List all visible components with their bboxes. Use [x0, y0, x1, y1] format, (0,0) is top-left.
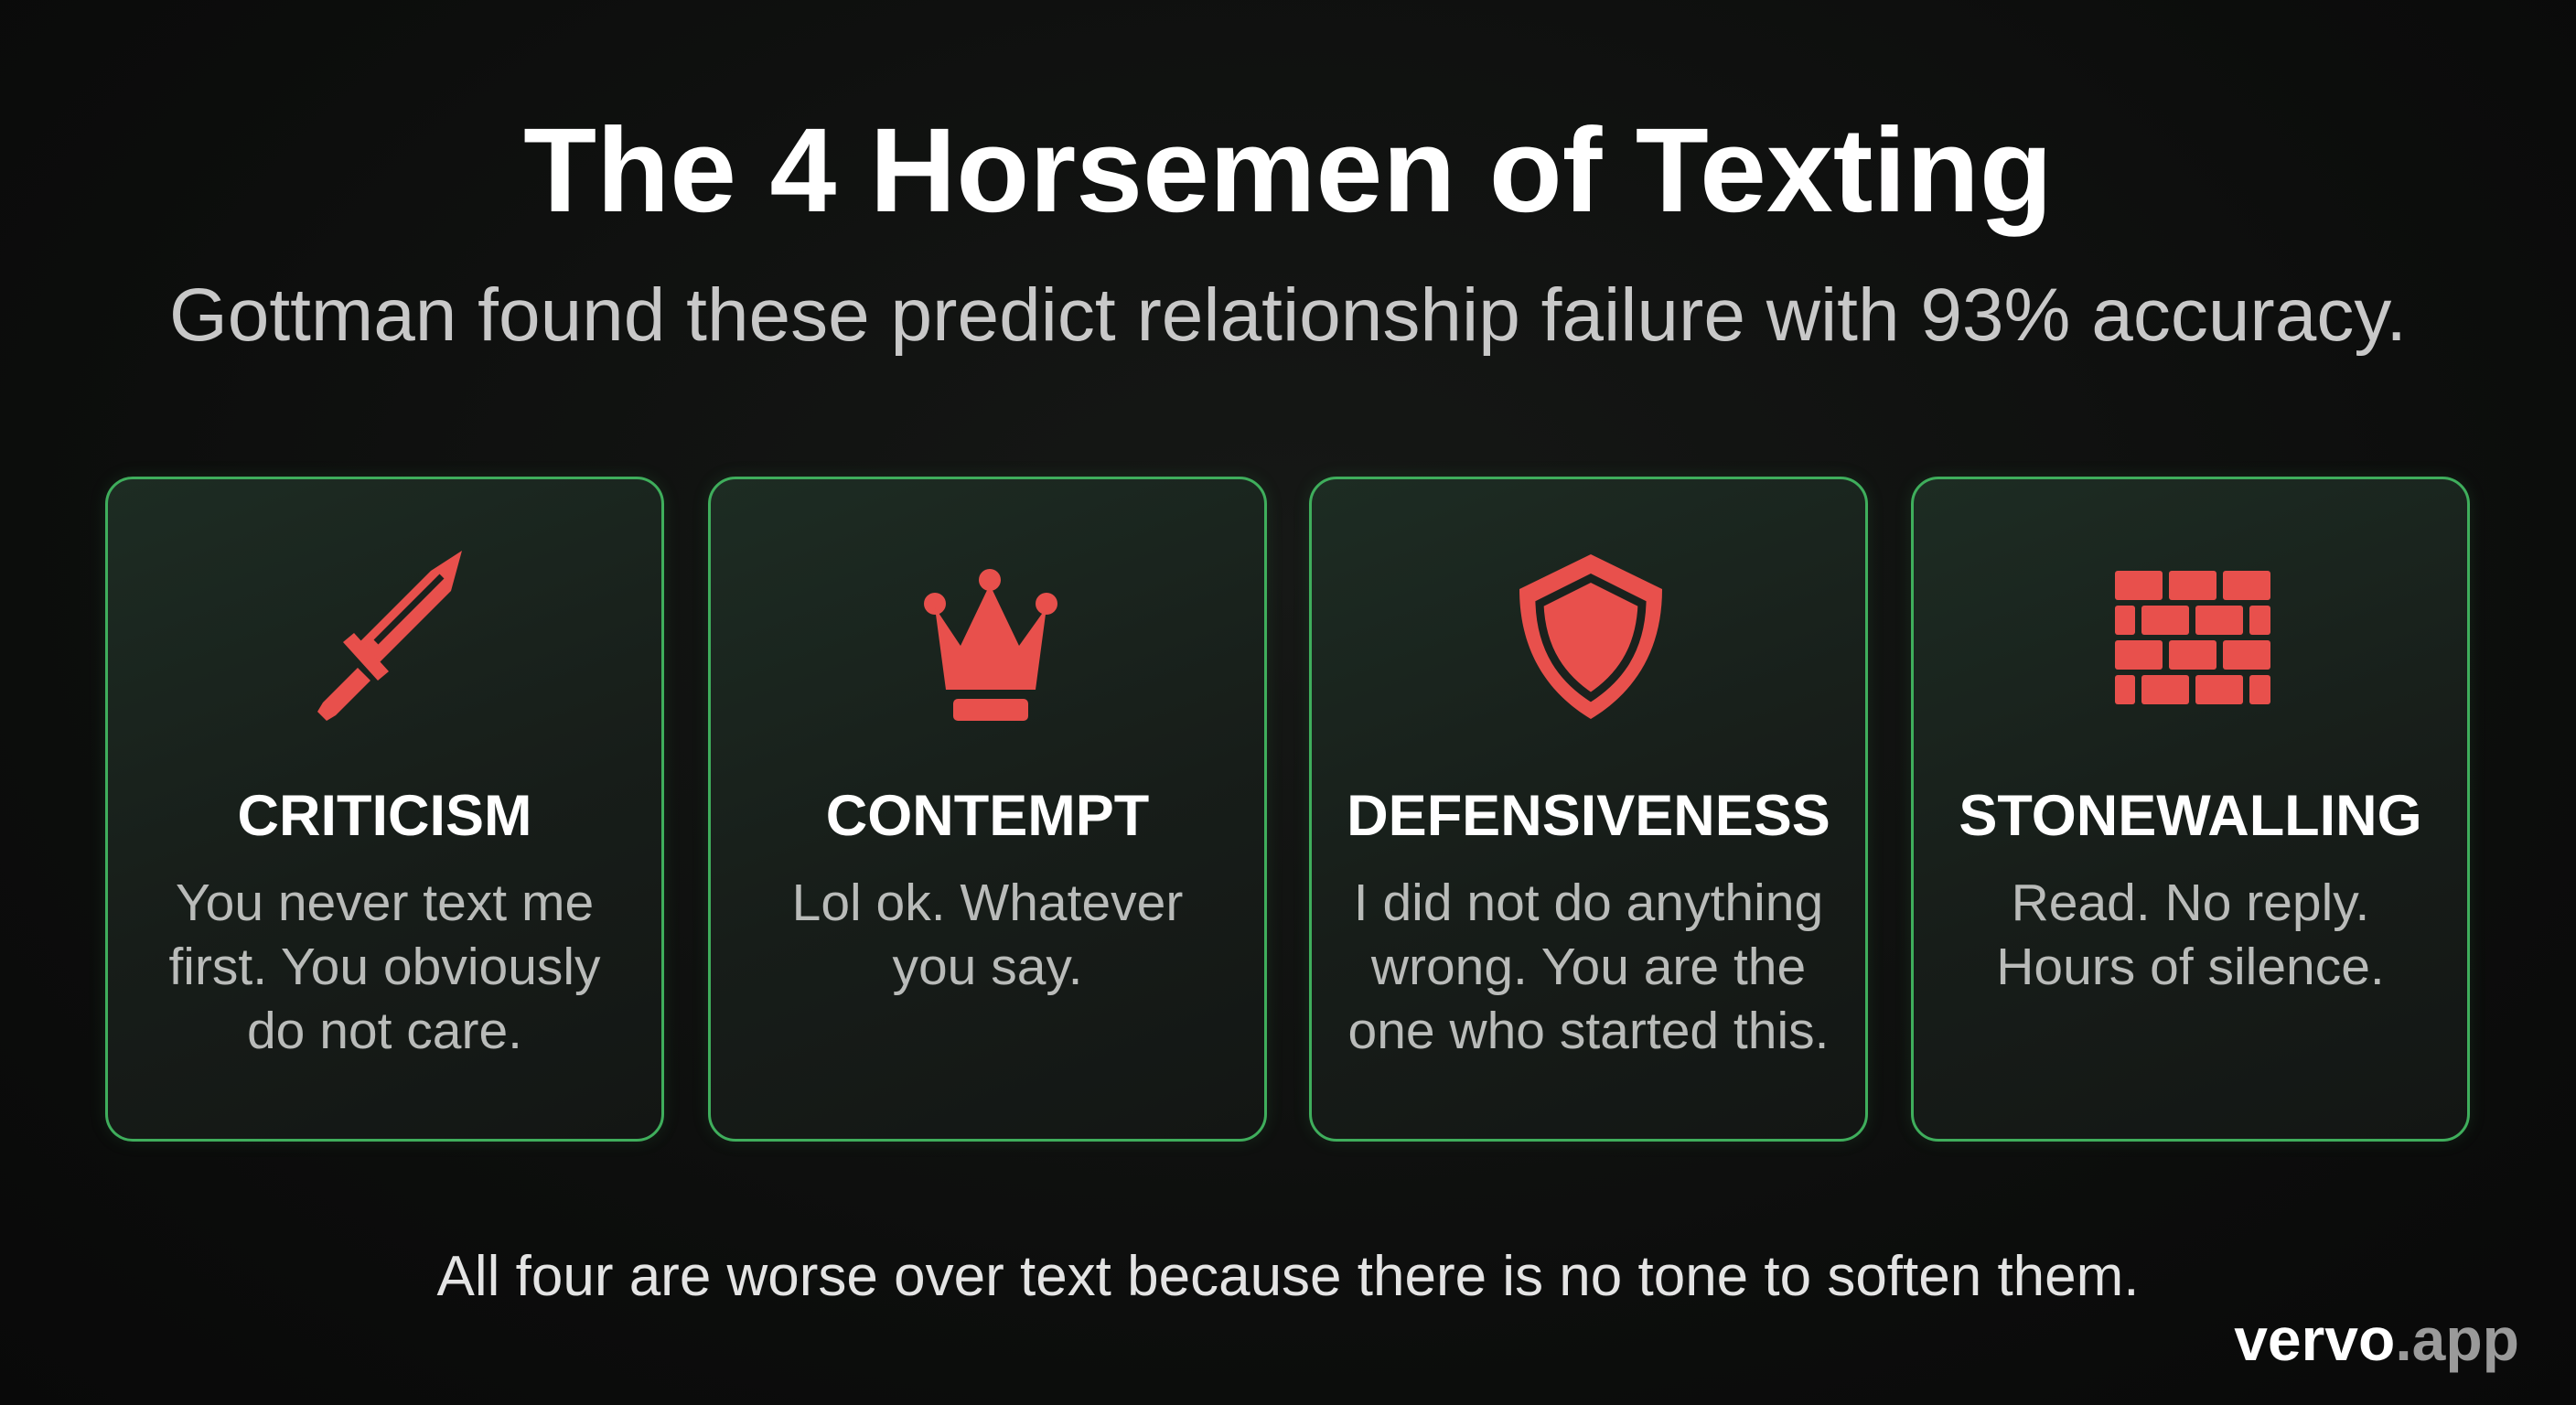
text: stonewalling example: [1996, 874, 2385, 996]
heading: defensiveness: DEFENSIVENESS: [1347, 784, 1830, 848]
heading: contempt: CONTEMPT: [826, 784, 1149, 848]
panel: criticism: [105, 477, 664, 1142]
panel: defensiveness: [1309, 477, 1868, 1142]
brand: vervo.app: vervo.app: [2234, 1305, 2519, 1373]
icon: crown: [924, 569, 1057, 721]
title: The 4 Horsemen of Texting: [523, 102, 2053, 237]
text: defensiveness example: I did not do anything: [1354, 874, 1823, 932]
text: criticism example: You never text me: [176, 874, 594, 932]
text: defensiveness example: wrong. You are the: [1371, 938, 1806, 996]
text: stonewalling example: Hours of silence.: [1996, 938, 2385, 996]
text: stonewalling example: Read. No reply.: [2012, 874, 2369, 932]
text: contempt example: Lol ok. Whatever: [792, 874, 1183, 932]
heading: stonewalling: STONEWALLING: [1959, 784, 2422, 848]
text: defensiveness example: [1348, 874, 1829, 1060]
text: contempt example: [792, 874, 1183, 996]
icon: shield: [1519, 554, 1662, 719]
icon: brick wall: [2115, 571, 2270, 704]
text: contempt example: you say.: [892, 938, 1083, 996]
panel: contempt: [708, 477, 1267, 1142]
icon: sword: [317, 551, 462, 721]
text: defensiveness example: one who started this.: [1348, 1002, 1829, 1060]
text: criticism example: [168, 874, 601, 1060]
text: criticism example: do not care.: [247, 1002, 522, 1060]
text: criticism example: first. You obviously: [168, 938, 601, 996]
heading: criticism: CRITICISM: [238, 784, 531, 848]
footer note: All four are worse over text because there is no tone to soften them.: [437, 1245, 2139, 1308]
subtitle: Gottman found these predict relationship failure with 93% accuracy.: [169, 273, 2407, 357]
panel: stonewalling: [1911, 477, 2470, 1142]
